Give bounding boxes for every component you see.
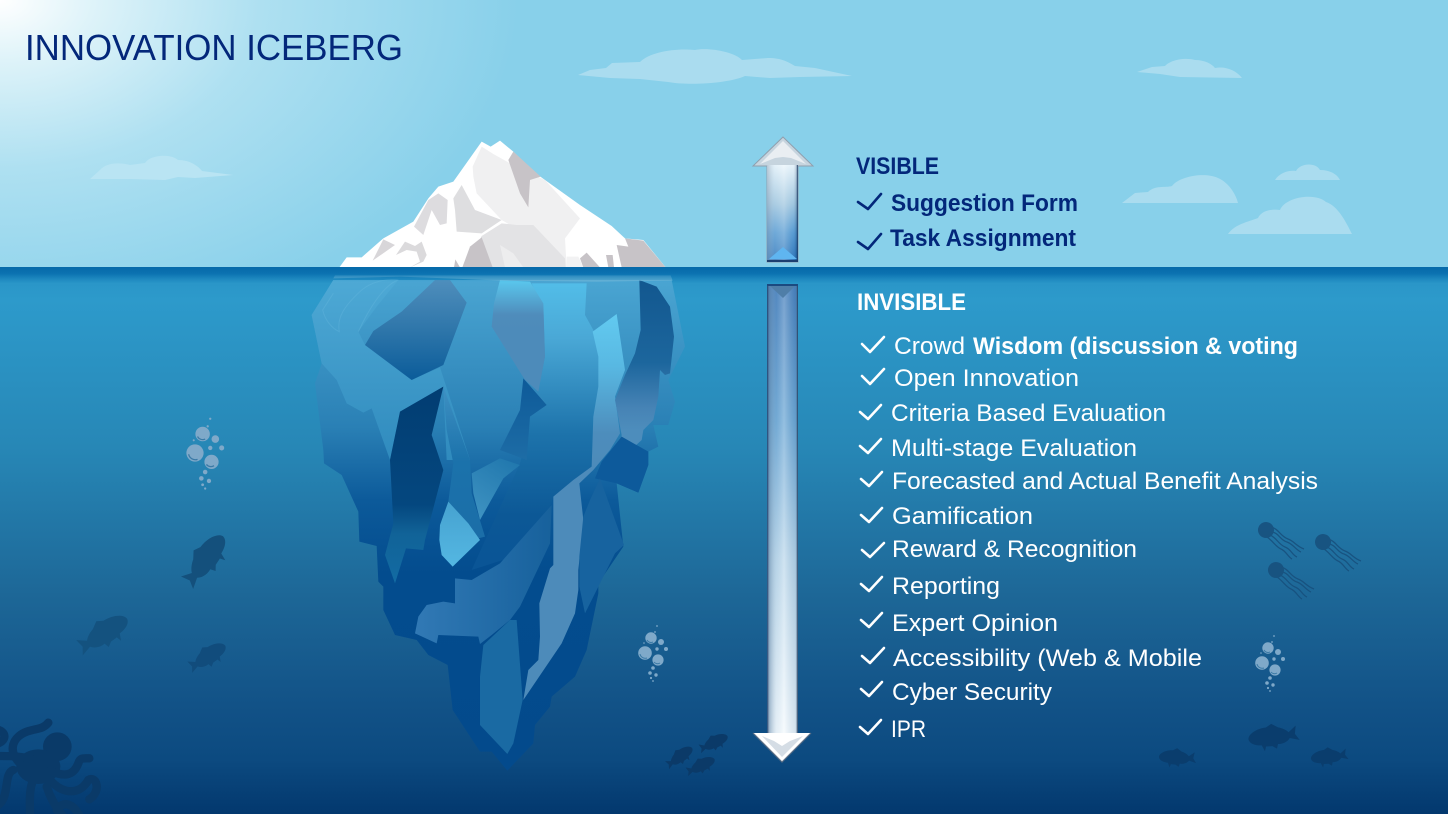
cloud: top right — [1137, 59, 1242, 78]
cloud: right lower — [1228, 197, 1352, 234]
bubbles: centre — [638, 625, 668, 682]
fish: right lower right — [1309, 744, 1349, 770]
item: ipr: IPR — [891, 716, 926, 743]
item: forecasted and actual benefit analysis: Forecasted and Actual Benefit Analysis — [892, 468, 1318, 495]
item: open innovation: Open Innovation — [894, 365, 1079, 392]
item: expert opinion: Expert Opinion — [892, 610, 1058, 637]
item: crowd wisdom: Wisdom (discussion & voting — [973, 333, 1298, 360]
jellyfish group — [1256, 520, 1361, 599]
fish: left upper — [174, 528, 236, 592]
item: task assignment: Task Assignment — [890, 225, 1076, 252]
waterline band — [0, 267, 1448, 282]
fish: right lower left — [1159, 747, 1196, 768]
item: multi-stage evaluation: Multi-stage Evaluation — [891, 435, 1137, 462]
bubbles: right — [1255, 635, 1285, 692]
fish: left lower — [184, 638, 231, 676]
iceberg — [312, 141, 685, 771]
item: ipr — [860, 716, 926, 743]
arrow: down (invisible) — [753, 284, 811, 762]
arrow: up (visible) — [753, 137, 813, 262]
item: reporting: Reporting — [892, 573, 1000, 600]
cloud: left — [90, 156, 233, 180]
fish: group centre — [662, 730, 731, 778]
item: gamification: Gamification — [892, 503, 1033, 530]
item: accessibility: Accessibility (Web & Mobile — [893, 645, 1202, 672]
octopus — [0, 723, 97, 814]
item: cyber security: Cyber Security — [892, 679, 1052, 706]
sky background — [0, 0, 1448, 268]
fish: left middle — [72, 608, 135, 659]
item: suggestion form: Suggestion Form — [891, 190, 1078, 217]
bubbles: left — [186, 418, 224, 490]
title: INNOVATION ICEBERG — [25, 27, 403, 68]
text block: invisible — [857, 289, 1318, 743]
ocean background — [0, 267, 1448, 814]
heading: invisible: INVISIBLE — [857, 289, 966, 316]
item: criteria based evaluation: Criteria Based Evaluation — [891, 400, 1166, 427]
item: crowd wisdom: Crowd — [894, 333, 965, 360]
iceberg below water — [312, 275, 685, 771]
cloud: top centre — [578, 49, 852, 84]
heading: visible: VISIBLE — [856, 153, 939, 180]
iceberg above water — [339, 141, 666, 267]
fish: right large — [1246, 719, 1300, 754]
text block: visible — [856, 153, 1078, 252]
cloud: right small — [1275, 164, 1340, 180]
item: reward and recognition: Reward & Recognition — [892, 536, 1137, 563]
cloud: right large — [1122, 175, 1238, 203]
